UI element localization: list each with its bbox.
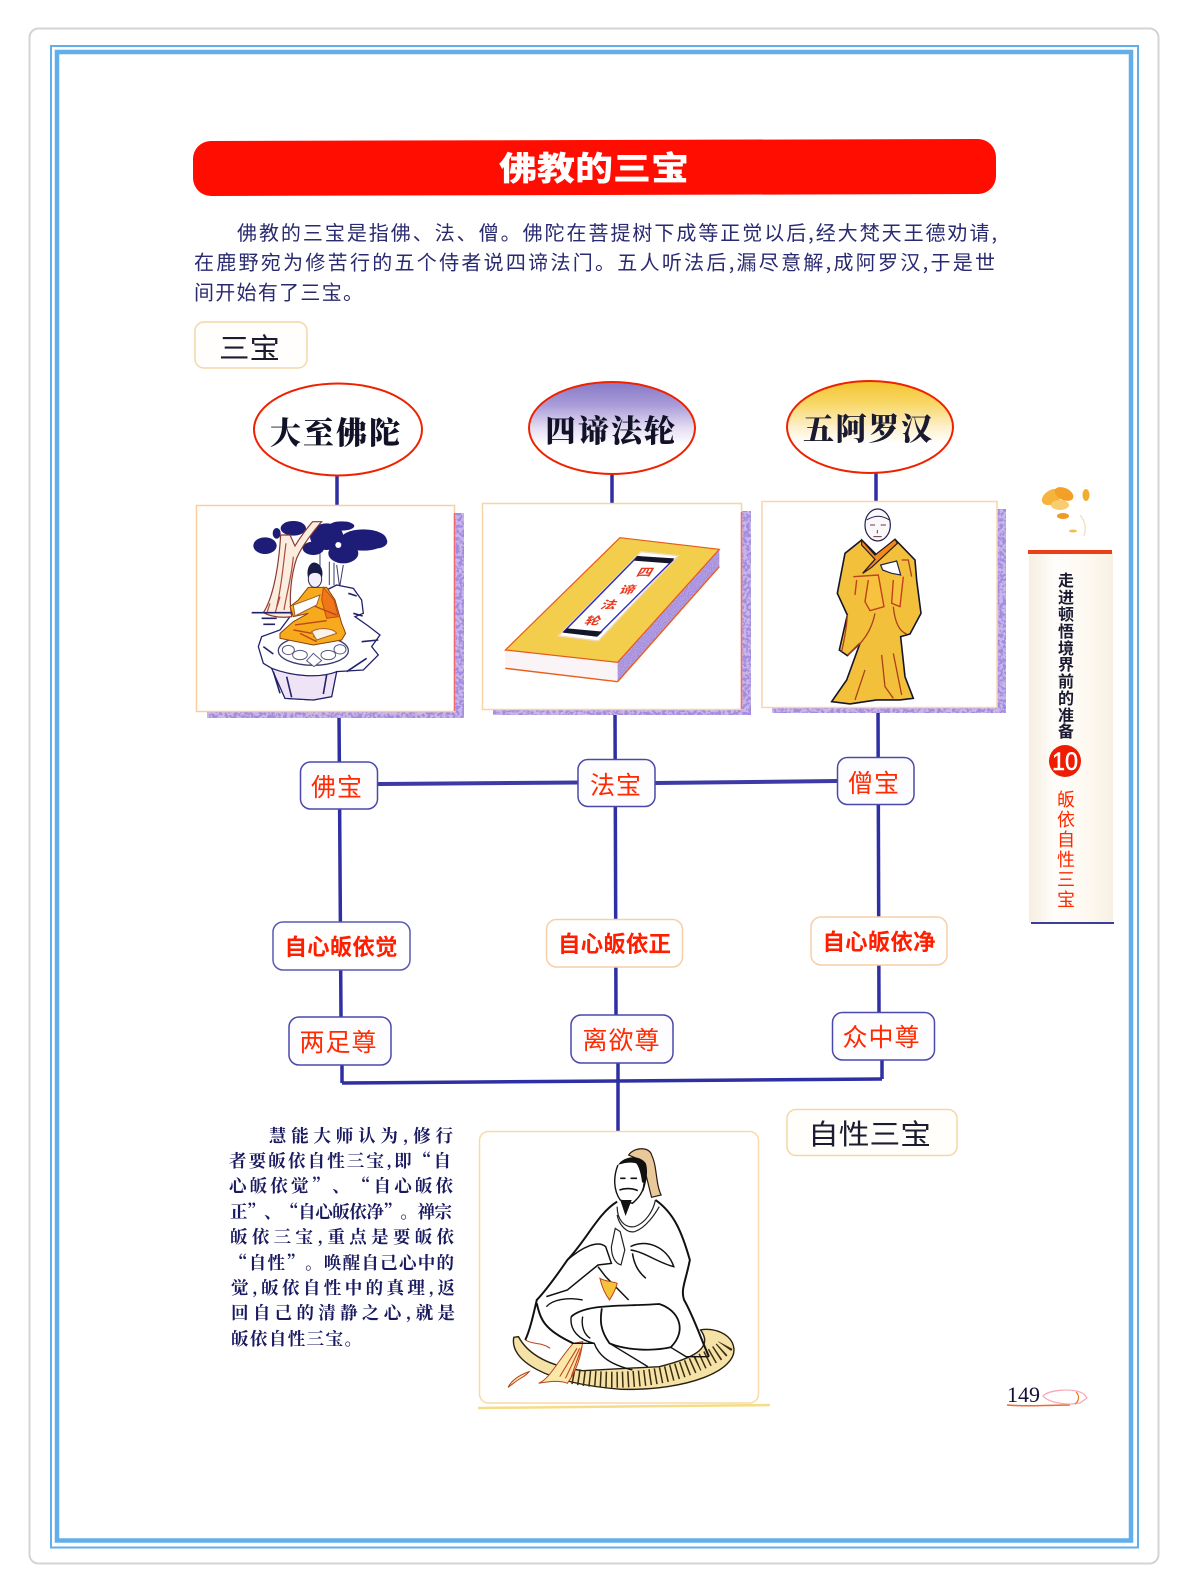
sidebar: section title: 依	[1057, 810, 1075, 830]
page number	[1007, 1382, 1087, 1407]
commentary text block: 皈依自性三宝。	[231, 1326, 362, 1351]
sidebar: chapter heading: 走	[1058, 572, 1074, 590]
commentary text block	[229, 1123, 455, 1351]
node: 法宝	[578, 760, 655, 806]
node: 佛宝: 佛宝	[311, 774, 362, 802]
intro paragraph: 间开始有了三宝。	[194, 276, 363, 306]
node: 众中尊: 众中尊	[842, 1024, 920, 1052]
illustration: standing monk	[832, 509, 921, 704]
label: 自性三宝	[787, 1110, 957, 1156]
oval: 大至佛陀	[254, 384, 422, 476]
sidebar: section title: 自	[1057, 830, 1075, 850]
illustration: Buddha	[252, 521, 387, 700]
commentary text block: 回自己的清静之心,就是	[231, 1300, 455, 1325]
sidebar: section title	[1057, 790, 1075, 910]
connector lines	[337, 473, 882, 1131]
sidebar: chapter heading: 悟	[1058, 623, 1074, 641]
node: 自心皈依净	[811, 917, 947, 965]
oval: 四谛法轮	[529, 382, 695, 474]
sidebar: chapter heading: 界	[1058, 656, 1074, 674]
oval: 四谛法轮: 四谛法轮	[545, 414, 675, 449]
section label: 三宝	[195, 322, 307, 368]
node: 众中尊	[832, 1012, 934, 1060]
commentary text block: “自性”。唤醒自己心中的	[230, 1250, 454, 1275]
sidebar: section title: 皈	[1057, 790, 1075, 810]
commentary text block: 觉,皈依自性中的真理,返	[231, 1275, 455, 1300]
book label text: 谛	[617, 583, 639, 596]
sidebar: chapter heading	[1058, 572, 1074, 741]
node: 佛宝	[300, 762, 378, 809]
commentary text block: 者要皈依自性三宝,即“自	[229, 1148, 451, 1173]
panel: Arhat monk	[762, 502, 1006, 713]
sidebar: chapter heading: 备	[1058, 722, 1074, 741]
oval: 五阿罗汉	[787, 381, 953, 473]
sidebar: section title: 性	[1057, 850, 1075, 870]
commentary text block: 心皈依觉”、“自心皈依	[229, 1173, 454, 1198]
title banner	[193, 139, 996, 196]
panel: Buddha under the bodhi tree	[196, 506, 464, 718]
book label text: 法	[598, 599, 620, 611]
node: 自心皈依觉: 自心皈依觉	[284, 935, 398, 960]
sidebar: chapter heading: 准	[1058, 707, 1074, 725]
book label text: 四	[634, 566, 656, 578]
intro paragraph	[194, 217, 997, 306]
sidebar: chapter heading: 的	[1058, 690, 1074, 708]
book label text: 轮	[582, 615, 604, 627]
illustration: sutra book	[505, 538, 719, 682]
section label: 三宝: 三宝	[219, 333, 280, 364]
sidebar: chapter heading: 前	[1058, 672, 1074, 691]
commentary text block: 皈依三宝,重点是要皈依	[230, 1224, 454, 1249]
page number: 149	[1007, 1382, 1040, 1407]
node: 法宝: 法宝	[590, 772, 641, 800]
panel: Huineng portrait	[478, 1132, 770, 1408]
node: 两足尊	[289, 1017, 391, 1065]
label: 自性三宝: 自性三宝	[808, 1119, 931, 1150]
node: 离欲尊: 离欲尊	[582, 1027, 660, 1055]
sidebar: chapter heading: 顿	[1058, 606, 1074, 624]
node: 僧宝: 僧宝	[848, 770, 899, 798]
intro paragraph: 在鹿野宛为修苦行的五个侍者说四谛法门。五人听法后,漏尽意解,成阿罗汉,于是世	[194, 246, 995, 276]
panel: Dharma sutra book	[482, 504, 751, 715]
title banner: 佛教的三宝	[499, 150, 689, 187]
node: 离欲尊	[571, 1015, 673, 1063]
node: 自心皈依正: 自心皈依正	[558, 932, 671, 957]
node: 僧宝	[838, 758, 914, 804]
node: 两足尊: 两足尊	[300, 1029, 376, 1057]
node: 自心皈依正	[546, 920, 682, 967]
sidebar: section title: 三	[1057, 870, 1075, 890]
intro paragraph: 佛教的三宝是指佛、法、僧。佛陀在菩提树下成等正觉以后,经大梵天王德劝请,	[237, 217, 997, 246]
illustration: seated master	[508, 1149, 734, 1389]
commentary text block: 慧能大师认为,修行	[269, 1123, 454, 1148]
commentary text block: 正”、“自心皈依净”。禅宗	[230, 1199, 452, 1224]
sidebar tab	[1028, 552, 1114, 923]
sidebar: section title: 宝	[1057, 890, 1075, 910]
book label text	[582, 566, 656, 627]
sidebar: number badge: 10	[1052, 748, 1078, 776]
node: 自心皈依净: 自心皈依净	[822, 930, 936, 955]
oval: 大至佛陀: 大至佛陀	[270, 416, 400, 451]
sidebar lotus icon	[1039, 484, 1090, 536]
sidebar: chapter heading: 境	[1058, 639, 1074, 658]
node: 自心皈依觉	[273, 922, 410, 970]
sidebar: chapter heading: 进	[1058, 589, 1074, 607]
oval: 五阿罗汉: 五阿罗汉	[803, 412, 932, 447]
